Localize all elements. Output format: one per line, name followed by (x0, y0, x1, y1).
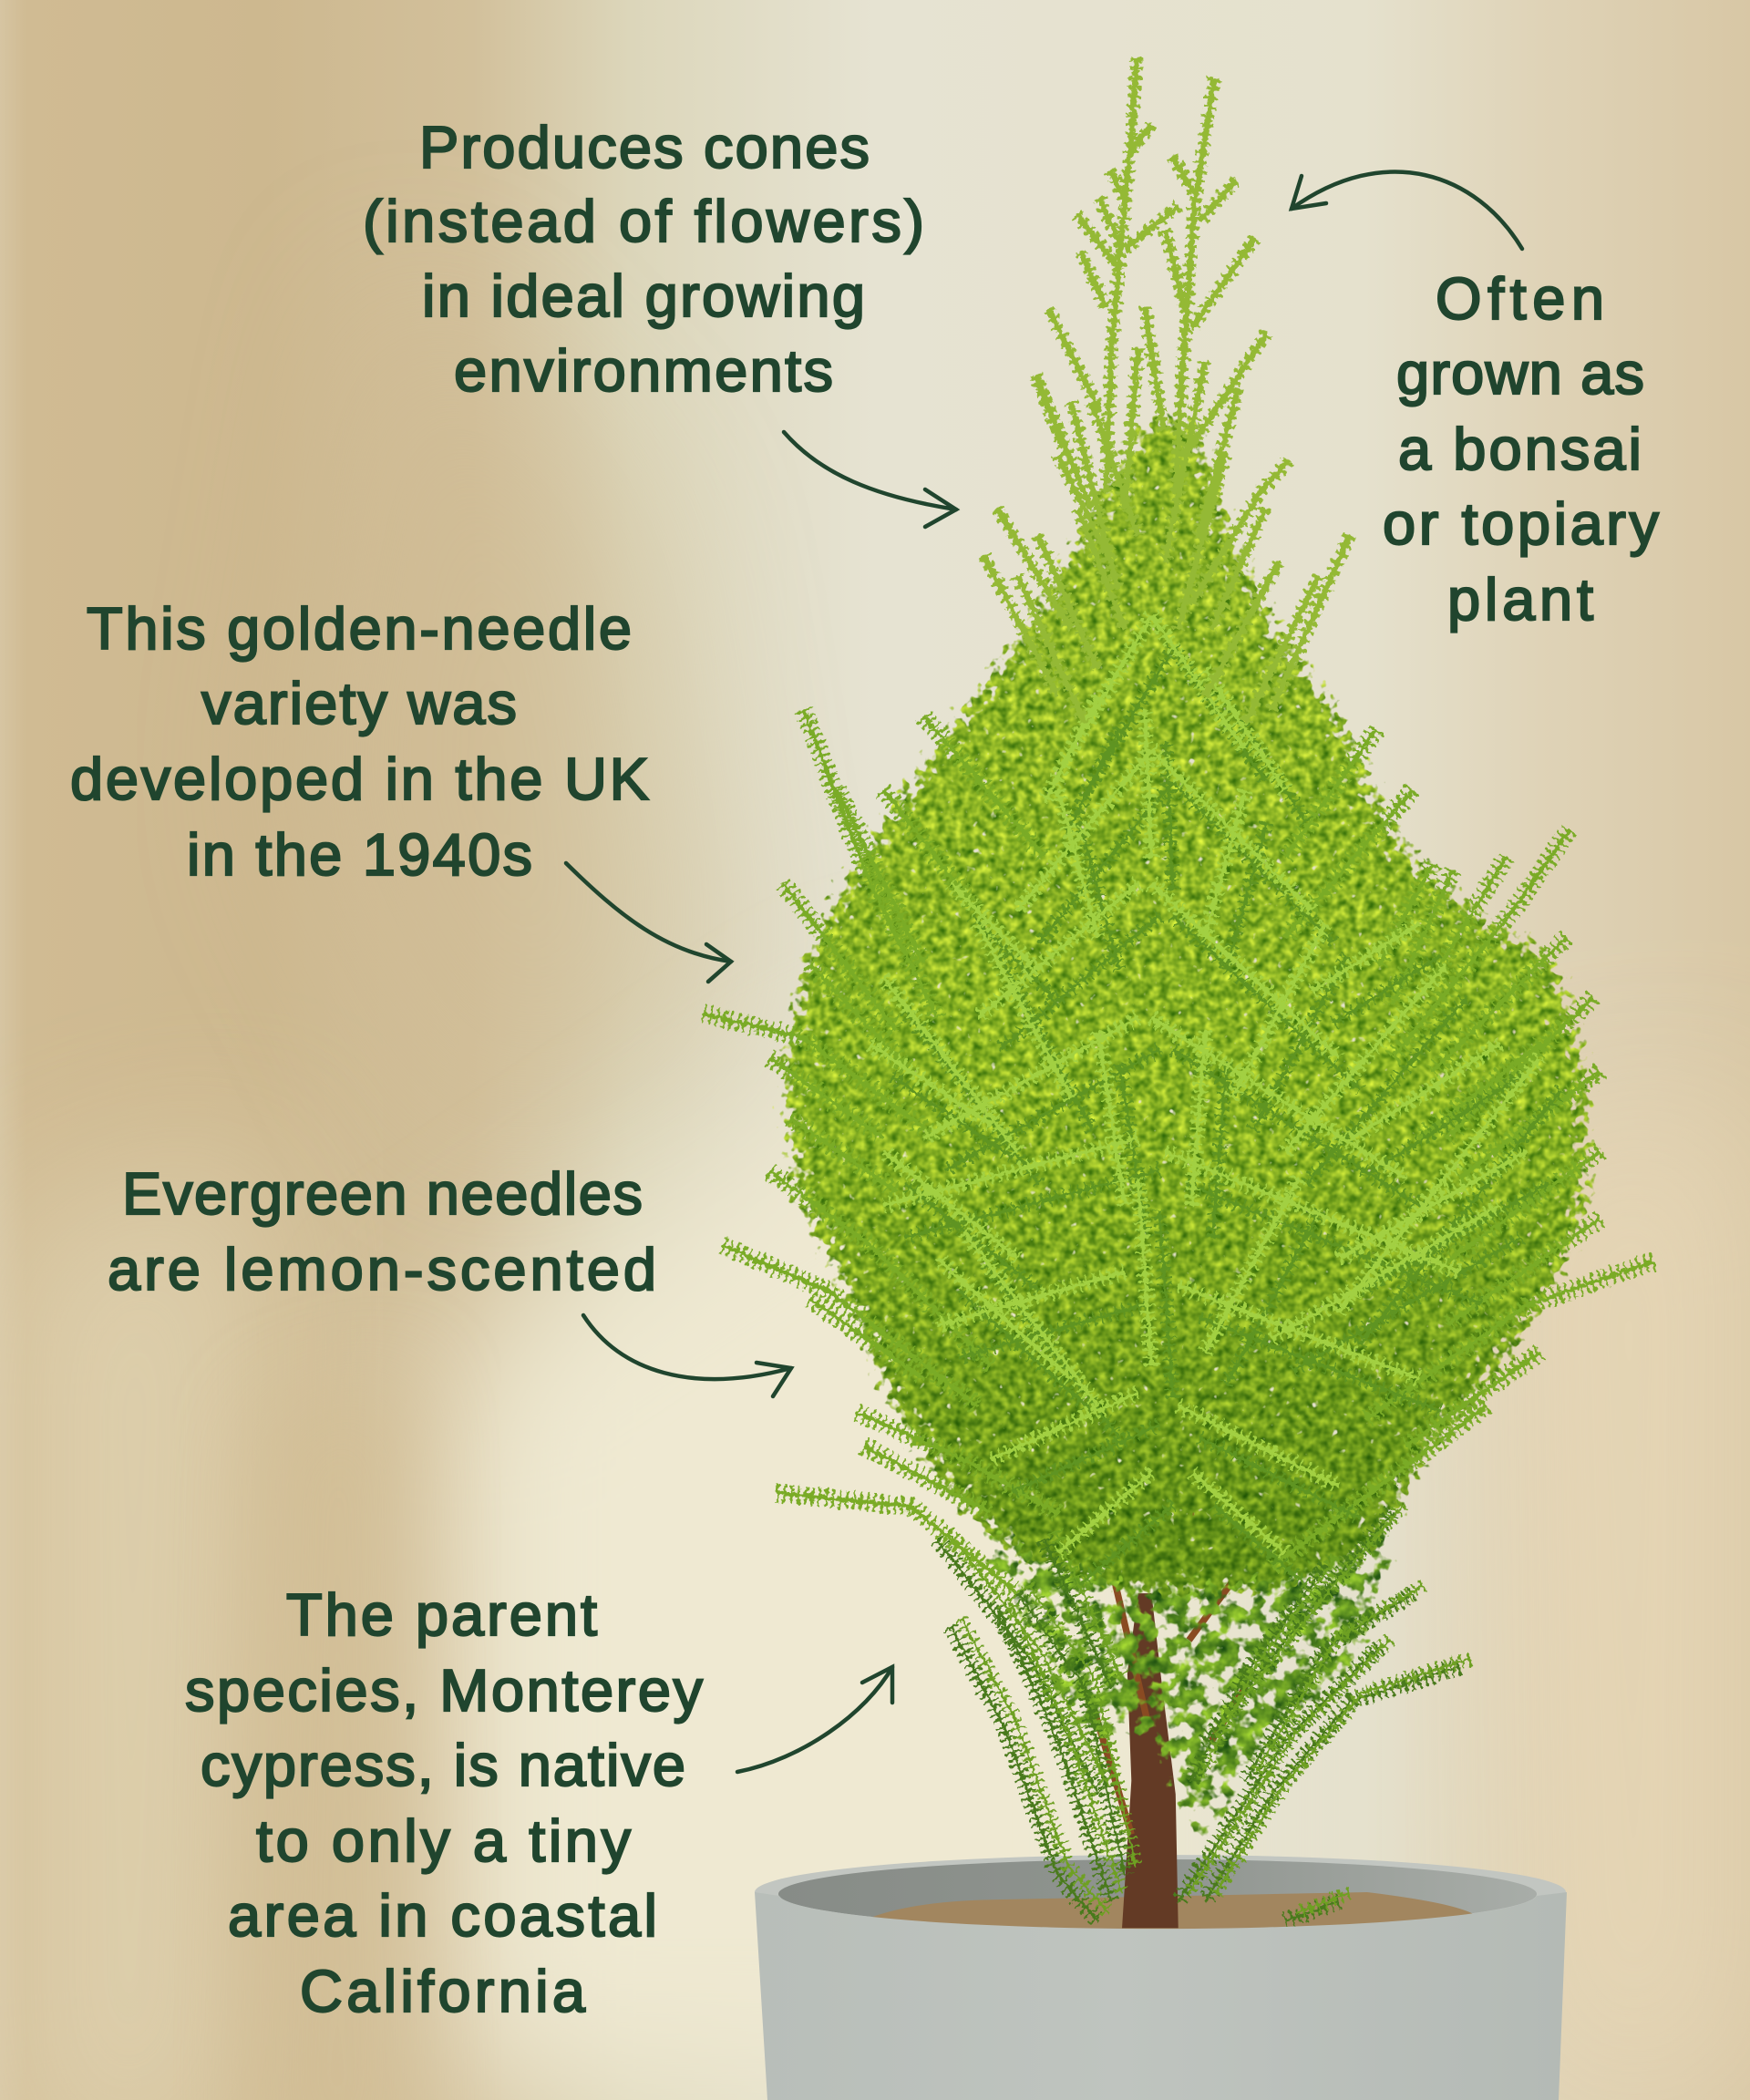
callout: Monterey cypress: California (300, 1958, 586, 2024)
top sprigs (984, 57, 1350, 723)
sparse lower foliage (951, 1513, 1405, 1875)
foliage mass (770, 402, 1600, 1607)
callout: often grown as bonsai: or topiary (1383, 490, 1659, 557)
callout: golden-needle variety (70, 595, 649, 888)
callout: lemon-scented needles: are lemon-scented (108, 1236, 656, 1302)
outer branches (703, 710, 1653, 1593)
callout: Monterey cypress: cypress, is native (201, 1732, 685, 1798)
callout: produces cones: Produces cones (419, 114, 870, 180)
callout: lemon-scented needles: Evergreen needles (122, 1160, 643, 1227)
callout: Monterey cypress: to only a tiny (256, 1807, 631, 1874)
callout: often grown as bonsai: plant (1447, 566, 1593, 633)
callout: often grown as bonsai: Often (1436, 265, 1604, 332)
arrow: Monterey cypress (737, 1667, 892, 1772)
callout: Monterey cypress: The parent (286, 1581, 597, 1648)
plant: lemon cypress tree (703, 57, 1653, 1928)
side stems (1091, 1453, 1245, 1835)
main trunk (1122, 1593, 1179, 1928)
callout: Monterey cypress: species, Monterey (185, 1657, 704, 1724)
callout: Monterey cypress (185, 1581, 704, 2024)
lower branches (937, 1513, 1459, 1921)
callout: produces cones: environments (454, 337, 833, 404)
pot interior and soil (755, 1855, 1566, 1934)
callout: golden-needle variety: in the 1940s (187, 821, 532, 888)
pot front (755, 1892, 1567, 2100)
inner shaded sprays (891, 648, 1561, 1585)
callout: often grown as bonsai: a bonsai (1398, 416, 1642, 482)
callout: produces cones: (instead of flowers) (363, 188, 924, 254)
callout: golden-needle variety: This golden-needle (87, 595, 632, 662)
callout: golden-needle variety: developed in the UK (70, 746, 649, 812)
callout: Monterey cypress: area in coastal (228, 1882, 657, 1949)
arrow: produces cones (784, 432, 956, 527)
callout: produces cones: in ideal growing (422, 262, 865, 329)
callout: often grown as bonsai (1383, 265, 1659, 633)
arrow: golden-needle variety (566, 863, 731, 982)
arrow: often grown as bonsai (1292, 172, 1522, 249)
callout: lemon-scented needles (108, 1160, 656, 1302)
arrow: lemon-scented needles (583, 1315, 791, 1396)
callout: often grown as bonsai: grown as (1396, 340, 1644, 407)
callout: produces cones (363, 114, 924, 404)
inner light sprays (870, 616, 1539, 1553)
callout: golden-needle variety: variety was (201, 670, 517, 736)
